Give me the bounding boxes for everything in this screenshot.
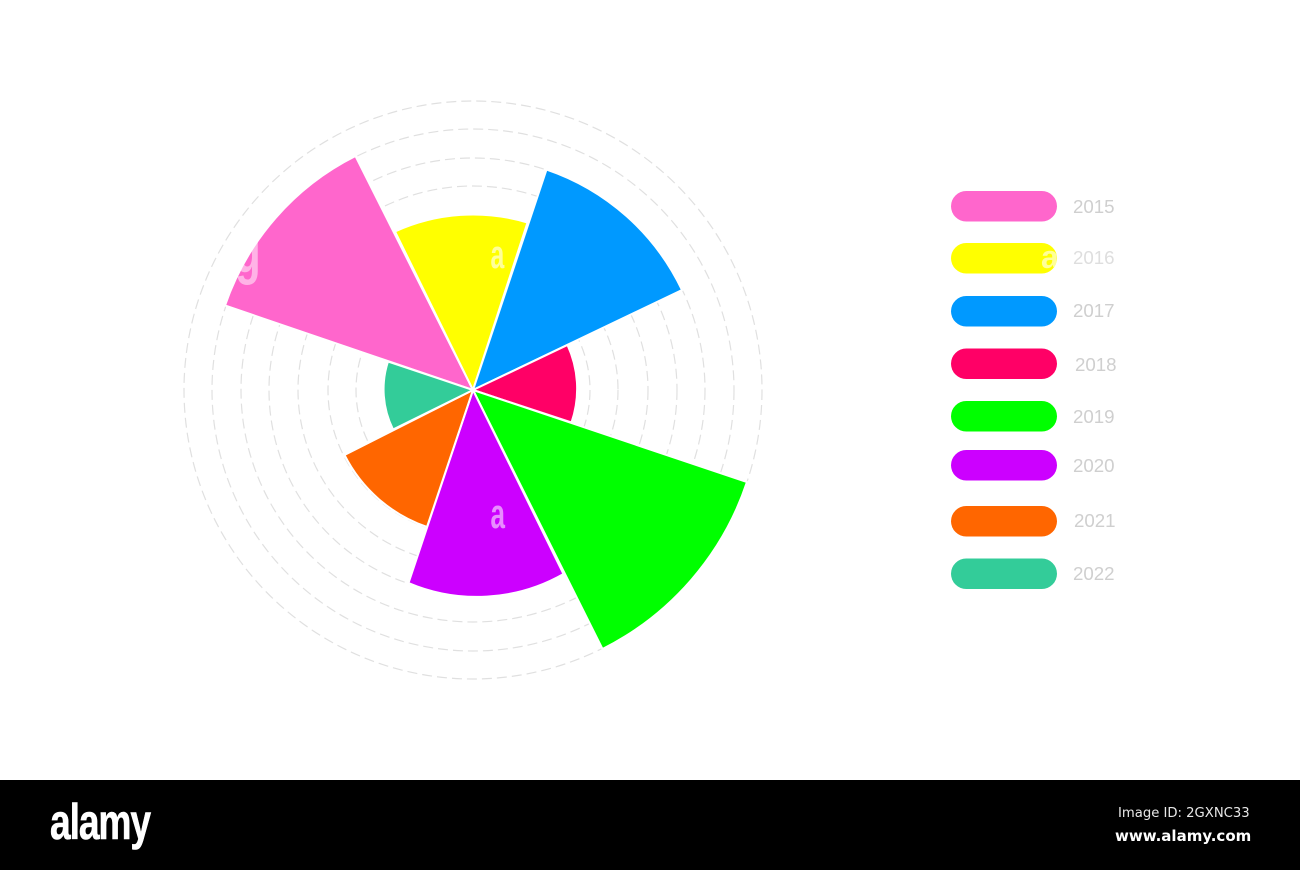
wedge: 2021 orange: [344, 390, 473, 527]
legend item: 2019: [951, 401, 1115, 432]
legend item: 2022: [951, 558, 1115, 589]
legend item: 2020: 2020: [1073, 455, 1115, 476]
footer image id: Image ID: 2GXNC33: [1118, 806, 1250, 821]
radial grid rings: [184, 101, 762, 679]
legend item: 2018: 2018: [1075, 354, 1117, 375]
wedge: 2018 red: [473, 345, 577, 422]
legend item: 2017: [951, 296, 1115, 326]
legend item: 2022: 2022: [1073, 563, 1115, 584]
watermark letter on purple wedge: a: [490, 491, 505, 538]
wedge: 2020 purple: [408, 390, 564, 597]
legend item: 2021: 2021: [1074, 510, 1116, 531]
footer website: www.alamy.com: [1115, 827, 1251, 845]
legend item: 2019: 2019: [1073, 406, 1115, 427]
wedge: 2016 yellow: [395, 214, 528, 390]
legend item: 2016: 2016: [1073, 247, 1115, 268]
footer bar: [0, 780, 1300, 870]
legend item: 2020: [951, 450, 1115, 480]
legend item: 2015: [951, 191, 1115, 222]
wedge: 2019 green: [473, 390, 747, 649]
legend item: 2021: [951, 506, 1116, 536]
watermark letter on yellow wedge: a: [490, 233, 505, 278]
wedge: 2015 pink: [225, 156, 473, 390]
legend item: 2018: [951, 348, 1117, 379]
legend item: 2015: 2015: [1073, 196, 1115, 217]
watermark letter on pink wedge: g: [235, 218, 261, 285]
legend item: 2017: 2017: [1073, 300, 1115, 321]
legend item: 2016: [951, 243, 1114, 274]
legend item: 2016: a: [1041, 239, 1059, 275]
wedge: 2022 teal: [384, 362, 473, 430]
polar area chart: [225, 156, 747, 649]
wedge: 2017 blue: [473, 170, 682, 390]
legend: [951, 191, 1117, 589]
footer logo: alamy: alamy: [50, 795, 152, 850]
